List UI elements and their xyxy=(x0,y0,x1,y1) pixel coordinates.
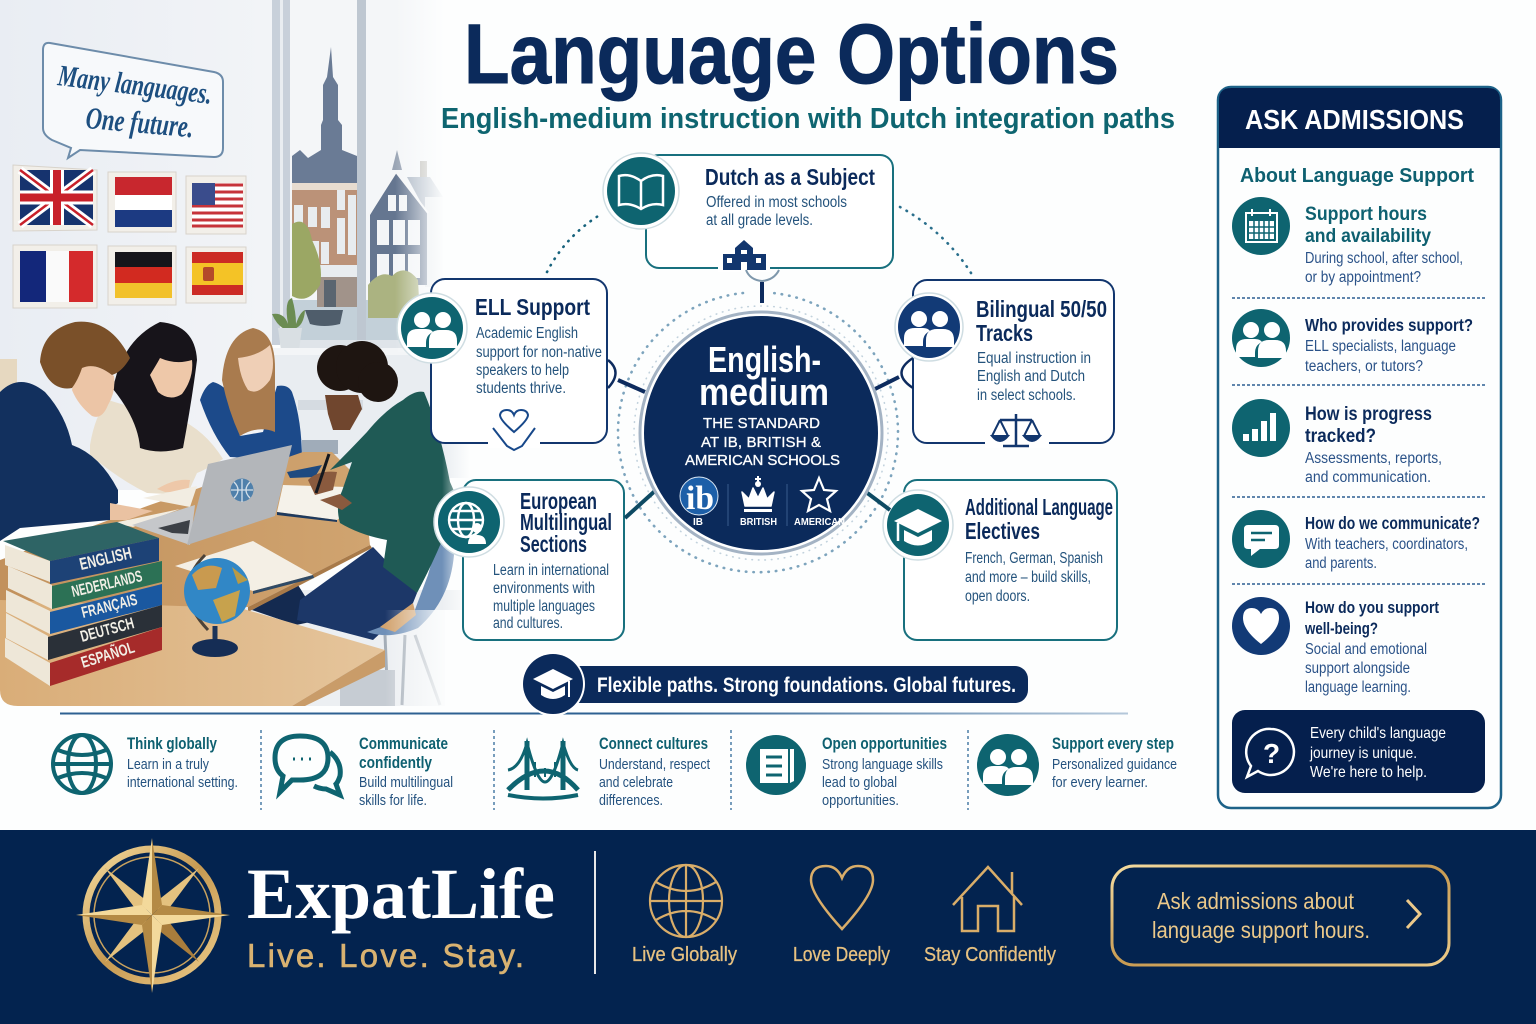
far house xyxy=(368,150,443,318)
card: Dutch as a Subject: Offered in most schools xyxy=(706,194,847,211)
icon: school building xyxy=(718,240,770,272)
feature: Support every step: for every learner. xyxy=(1052,774,1148,791)
call to action: Ask admissions about xyxy=(1157,888,1355,914)
card: Bilingual 50/50 Tracks: in select schools. xyxy=(977,387,1076,404)
row: well-being: How do you support xyxy=(1305,599,1439,617)
row: well-being xyxy=(1232,597,1439,696)
student in navy hoodie xyxy=(0,322,153,541)
card: European Multilingual Sections: Sections xyxy=(520,531,587,557)
banner: Flexible paths xyxy=(521,652,1028,716)
icon: IB logo: IB xyxy=(693,517,703,528)
feature: Think globally: Learn in a truly xyxy=(127,756,209,773)
icon: IB logo xyxy=(680,477,718,528)
row: well-being: Social and emotional xyxy=(1305,641,1427,658)
row: communication xyxy=(1232,510,1480,572)
flag: Germany xyxy=(108,246,176,305)
row: progress tracking: Assessments, reports, xyxy=(1305,450,1442,467)
feature row xyxy=(53,730,1177,810)
student in green hoodie xyxy=(308,341,458,593)
card: Additional Language Electives: Electives xyxy=(965,518,1040,544)
icon: heart handshake xyxy=(493,410,535,450)
jeans and chair xyxy=(240,542,470,708)
table xyxy=(0,452,370,607)
center hub: English-medium: AT IB, BRITISH & xyxy=(701,434,821,451)
feature: Connect cultures: differences. xyxy=(599,792,663,809)
icon: IB logo: ib xyxy=(686,480,714,517)
subtitle: English-medium instruction with Dutch integration paths xyxy=(441,103,1175,135)
stack of language books: FRANÇAIS xyxy=(80,592,139,622)
feature: Open opportunities: Open opportunities xyxy=(822,735,947,753)
card: European Multilingual Sections: multiple languages xyxy=(493,598,595,615)
row: progress tracking: and communication. xyxy=(1305,469,1431,486)
row: support hours: Support hours xyxy=(1305,203,1427,225)
feature: Communicate confidently: Build multilingual xyxy=(359,774,453,791)
card: European Multilingual Sections: Multilingual xyxy=(520,509,612,535)
pillar: Live Globally: Live Globally xyxy=(632,944,737,966)
flag: Spain xyxy=(186,247,246,303)
card: European Multilingual Sections xyxy=(434,480,624,640)
row: who provides support: Who provides support? xyxy=(1305,315,1473,335)
call to action: language support hours. xyxy=(1152,917,1370,943)
card: ELL Support xyxy=(397,279,607,450)
feature: Connect cultures: Understand, respect xyxy=(599,756,711,773)
flag: United States xyxy=(186,176,246,234)
icon: globe with person xyxy=(434,487,504,557)
card: ELL Support: students thrive. xyxy=(476,380,566,397)
notebooks xyxy=(113,465,363,594)
feature: Communicate confidently: skills for life. xyxy=(359,792,427,809)
stack of language books: ENGLISH xyxy=(78,543,134,574)
feature: Open opportunities: opportunities. xyxy=(822,792,899,809)
callout: every child's journey: ? xyxy=(1263,738,1280,769)
panel header xyxy=(1219,88,1500,148)
card: Bilingual 50/50 Tracks: English and Dutch xyxy=(977,368,1085,385)
card: Additional Language Electives: and more – build skills, xyxy=(965,569,1091,586)
row: well-being: language learning. xyxy=(1305,679,1411,696)
panel header: ASK ADMISSIONS xyxy=(1245,104,1464,135)
card: Bilingual 50/50 Tracks: Tracks xyxy=(976,320,1033,346)
center hub: English-medium xyxy=(640,312,882,554)
card: Bilingual 50/50 Tracks: Bilingual 50/50 xyxy=(976,296,1107,322)
panel subheading: About Language Support xyxy=(1240,164,1474,187)
card: Additional Language Electives: open doors. xyxy=(965,588,1030,605)
row: progress tracking: How is progress xyxy=(1305,403,1432,425)
feature: Support every step xyxy=(977,734,1177,796)
icon: British crown: BRITISH xyxy=(740,517,777,528)
card: Dutch as a Subject xyxy=(603,153,893,272)
compass logo xyxy=(76,838,230,993)
card: Additional Language Electives xyxy=(883,480,1117,640)
center hub: English-medium: THE STANDARD xyxy=(703,415,820,432)
pillar: Love Deeply: Love Deeply xyxy=(793,944,890,966)
callout: every child's journey: journey is unique. xyxy=(1309,745,1417,762)
flag: United Kingdom xyxy=(13,165,97,231)
feature: Open opportunities: Strong language skills xyxy=(822,756,943,773)
feature: Connect cultures: and celebrate xyxy=(599,774,673,791)
pillar: Stay Confidently: Stay Confidently xyxy=(924,944,1056,966)
card: European Multilingual Sections: environments with xyxy=(493,580,595,597)
brand name: ExpatLife xyxy=(247,854,555,934)
icon: American star: AMERICAN xyxy=(794,517,845,528)
row: progress tracking: tracked? xyxy=(1305,425,1376,447)
icon: two people xyxy=(397,293,467,363)
window with Dutch skyline xyxy=(272,0,440,348)
row: support hours xyxy=(1232,197,1463,286)
banner: Flexible paths: Flexible paths. Strong foundations. Global futures. xyxy=(597,674,1016,697)
row: well-being: well-being? xyxy=(1304,620,1378,638)
feature: Think globally: Think globally xyxy=(127,735,218,753)
feature: Support every step: Personalized guidance xyxy=(1052,756,1177,773)
divider rule xyxy=(60,712,1128,714)
feature: Connect cultures: Connect cultures xyxy=(599,735,708,753)
pillar: Stay Confidently xyxy=(924,867,1056,966)
callout: every child's journey: We're here to help. xyxy=(1310,764,1427,781)
callout: every child's journey xyxy=(1232,710,1485,793)
feature: Communicate confidently: Communicate xyxy=(359,735,448,753)
row: support hours: and availability xyxy=(1305,225,1431,247)
card: ELL Support: Academic English xyxy=(476,325,578,342)
center hub: English-medium: AMERICAN SCHOOLS xyxy=(685,452,840,469)
card: Additional Language Electives: French, German, Spanish xyxy=(965,550,1103,567)
tagline: Live. Love. Stay. xyxy=(247,937,524,974)
card: Dutch as a Subject: at all grade levels. xyxy=(706,212,813,229)
row: communication: How do we communicate? xyxy=(1305,513,1480,533)
panel: Ask Admissions xyxy=(1218,87,1501,808)
call to action xyxy=(1112,866,1449,965)
dotted connecting arcs xyxy=(547,207,971,572)
connector lines xyxy=(608,270,913,518)
icon: graduation cap white xyxy=(533,669,573,699)
window sill and shelves xyxy=(272,348,470,478)
potted plant xyxy=(272,298,305,350)
card: ELL Support: speakers to help xyxy=(476,362,569,379)
flag: Netherlands xyxy=(108,172,176,232)
card: ELL Support: support for non-native xyxy=(476,344,602,361)
row: communication: With teachers, coordinators, xyxy=(1305,536,1468,553)
feature: Open opportunities: lead to global xyxy=(822,774,897,791)
row: communication: and parents. xyxy=(1305,555,1377,572)
classroom photo scene xyxy=(0,0,470,708)
card: European Multilingual Sections: Learn in international xyxy=(493,562,609,579)
speech bubble: Many languages. One future. xyxy=(43,43,223,158)
feature: Think globally xyxy=(53,735,238,793)
icon: American star xyxy=(794,478,845,528)
icon: British crown xyxy=(740,476,777,528)
speech bubble: Many languages. One future.: One future. xyxy=(84,100,195,144)
row: support hours: During school, after school, xyxy=(1305,250,1463,267)
feature: Open opportunities xyxy=(746,735,947,809)
icon: open book xyxy=(603,153,679,229)
front desk xyxy=(0,600,385,706)
icon: two people navy xyxy=(895,293,963,361)
card: European Multilingual Sections: and cultures. xyxy=(493,615,563,632)
icon: chevron xyxy=(1407,900,1420,928)
center hub: English-medium: medium xyxy=(699,372,829,414)
card: ELL Support: ELL Support xyxy=(475,294,590,320)
feature: Communicate confidently: confidently xyxy=(359,754,433,772)
row: who provides support xyxy=(1232,309,1473,375)
pillar: Live Globally xyxy=(632,865,737,966)
laptop xyxy=(132,445,292,545)
row: well-being: support alongside xyxy=(1305,660,1410,677)
student in blonde hair and blue top xyxy=(200,328,302,461)
stack of language books: DEUTSCH xyxy=(79,615,136,646)
row: who provides support: ELL specialists, language xyxy=(1305,338,1456,355)
footer band xyxy=(0,830,1536,1024)
feature: Communicate confidently xyxy=(275,735,453,809)
feature: Think globally: international setting. xyxy=(127,774,238,791)
fade overlays xyxy=(398,0,445,314)
row: progress tracking xyxy=(1232,399,1442,486)
icon: balance scales xyxy=(992,414,1040,446)
row: support hours: or by appointment? xyxy=(1305,269,1421,286)
feature: Support every step: Support every step xyxy=(1052,735,1174,753)
speech bubble: Many languages. One future.: Many languages. xyxy=(55,59,214,111)
title: Language Options xyxy=(464,7,1119,101)
student with black hair and cream sweater xyxy=(90,322,223,495)
stack of language books xyxy=(3,522,162,686)
feature: Connect cultures xyxy=(508,735,711,809)
row: who provides support: teachers, or tutors? xyxy=(1305,358,1423,375)
flags xyxy=(13,165,246,308)
stack of language books: ESPAÑOL xyxy=(78,637,137,672)
flag: France xyxy=(13,245,97,308)
desk globe xyxy=(184,555,250,657)
card: European Multilingual Sections: European xyxy=(520,488,597,514)
card: Dutch as a Subject: Dutch as a Subject xyxy=(705,164,875,190)
stack of language books: NEDERLANDS xyxy=(70,568,144,601)
callout: every child's journey: Every child's language xyxy=(1310,725,1446,742)
icon: graduation cap xyxy=(883,490,953,560)
center hub: English-medium: English- xyxy=(708,339,821,380)
pillar: Love Deeply xyxy=(793,866,890,966)
card: Additional Language Electives: Additional Language xyxy=(965,494,1113,520)
card: Bilingual 50/50 Tracks: Equal instruction in xyxy=(977,350,1091,367)
card: Bilingual 50/50 Tracks xyxy=(895,280,1114,448)
